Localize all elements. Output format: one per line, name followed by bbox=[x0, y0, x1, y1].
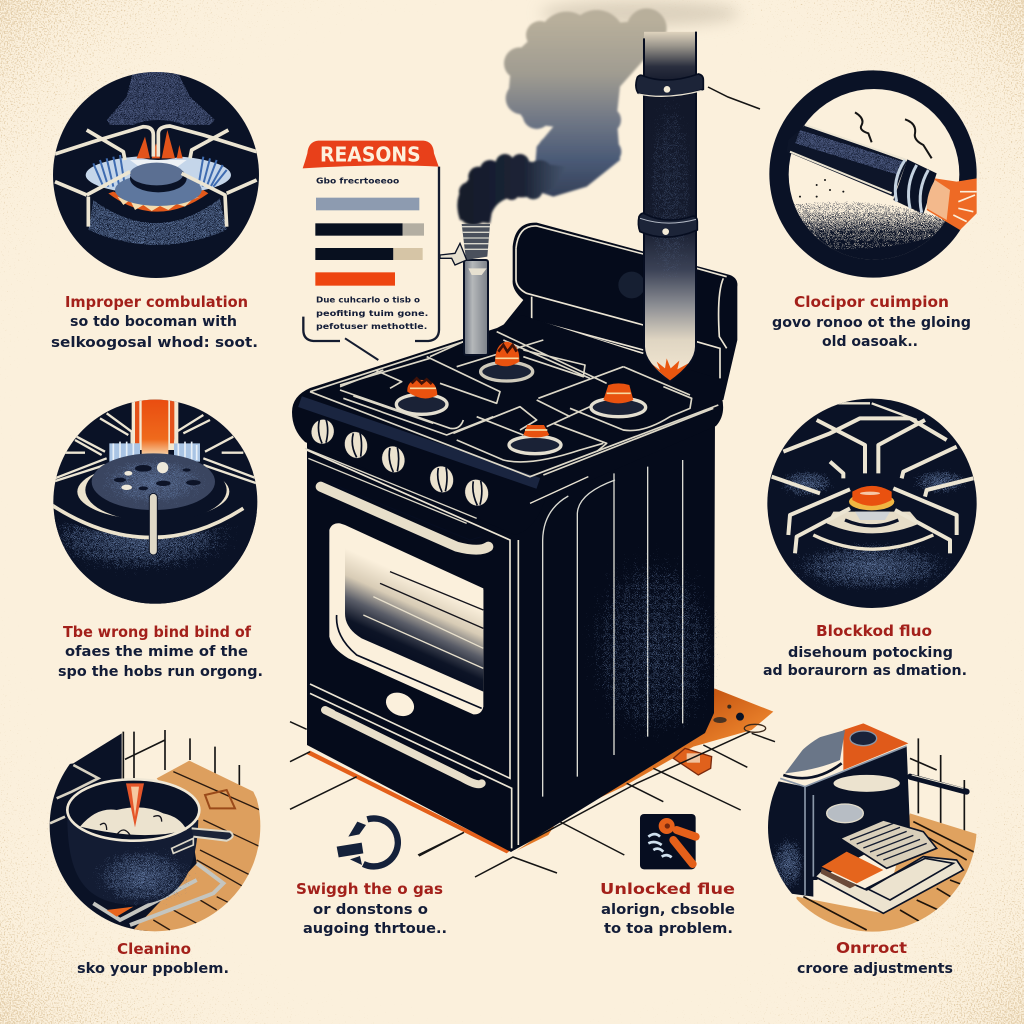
stove: body bbox=[292, 315, 723, 852]
bar 2 bbox=[315, 223, 424, 236]
caption: swirl: augoing thrtoue.. bbox=[303, 921, 447, 937]
icon: orange wrench square bbox=[640, 814, 696, 869]
bar 3 bbox=[315, 248, 423, 260]
caption: middle right: ad boraurorn as dmation. bbox=[763, 663, 967, 679]
icon: gas swirl ring bbox=[337, 818, 398, 866]
header banner bbox=[303, 141, 439, 168]
caption: bottom left: sko your ppoblem. bbox=[77, 961, 229, 977]
card body text: Due cuhcarlo o tisb o bbox=[316, 295, 420, 305]
stove: cooktop with grates, burners and knobs bbox=[300, 332, 718, 523]
caption: middle left: spo the hobs run orgong. bbox=[58, 664, 263, 680]
caption: top right: old oasoak.. bbox=[822, 334, 918, 350]
caption: wrench: to toa problem. bbox=[604, 921, 733, 937]
tall flue pipe bbox=[636, 32, 703, 383]
side panel soot speckle bbox=[578, 540, 728, 753]
burner: back bbox=[481, 342, 533, 381]
caption: bottom right bbox=[797, 939, 953, 977]
side panel ribs bbox=[543, 460, 683, 797]
small exhaust pipe bbox=[440, 224, 490, 355]
debris: orange scrap bbox=[673, 748, 712, 775]
caption: bottom left: Cleanino bbox=[117, 940, 191, 958]
lower drawer handle bbox=[325, 710, 482, 784]
caption: middle right: Blockkod fluo bbox=[816, 622, 932, 640]
caption: bottom right: Onrroct bbox=[836, 939, 907, 957]
caption: top right: govo ronoo ot the gloing bbox=[772, 315, 971, 331]
card body text: peofiting tuim gone. bbox=[316, 308, 428, 318]
caption: top right bbox=[772, 293, 971, 350]
circle: oven interior (bottom right) bbox=[768, 724, 976, 932]
front lip speckle band bbox=[300, 402, 538, 483]
oven window bbox=[329, 523, 483, 714]
floor lines below stove bbox=[418, 833, 557, 877]
caption: top right: Clocipor cuimpion bbox=[794, 293, 949, 311]
burner: left bbox=[396, 378, 447, 414]
caption: top left: selkoogosal whod: soot. bbox=[51, 335, 258, 351]
stove: oven door, window, handles and side panels bbox=[307, 450, 728, 848]
upper collar bbox=[636, 74, 703, 97]
caption: top left: Improper combulation bbox=[65, 293, 248, 311]
caption: wrench: alorign, cbsoble bbox=[601, 902, 735, 918]
circle: sooty burner cap (middle left) bbox=[53, 400, 258, 604]
door logo oval bbox=[382, 688, 418, 720]
knobs bbox=[309, 417, 491, 509]
card body text: pefotuser methottle. bbox=[316, 321, 427, 331]
caption: bottom right: croore adjustments bbox=[797, 961, 953, 977]
caption: wrench: Unlocked flue bbox=[600, 880, 735, 898]
caption: middle left: Tbe wrong bind bind of bbox=[63, 623, 251, 641]
circle: burner with yellow flames (top left) bbox=[53, 72, 259, 278]
circle: clogged hose (top right) bbox=[769, 70, 977, 287]
grate lines bbox=[310, 332, 718, 477]
circle: orange burner cap (middle right) bbox=[767, 398, 977, 608]
oven handle bbox=[321, 487, 488, 550]
callout line to top right circle bbox=[708, 87, 760, 109]
floor lines and orange soot spill bbox=[290, 688, 775, 856]
chart heading: Gbo frecrtoeeoo bbox=[316, 175, 400, 185]
caption: top left: so tdo bocoman with bbox=[70, 314, 237, 330]
smoke cloud bbox=[457, 0, 740, 225]
caption: middle left: ofaes the mime of the bbox=[65, 644, 248, 660]
caption: bottom left bbox=[77, 940, 229, 977]
burner: front bbox=[509, 425, 561, 454]
lower collar bbox=[638, 213, 697, 237]
caption: middle right bbox=[763, 622, 967, 679]
bar 1 bbox=[316, 198, 419, 210]
debris: small particles bbox=[713, 705, 766, 732]
caption: middle right: disehoum potocking bbox=[788, 645, 953, 661]
caption: swirl: Swiggh the o gas bbox=[296, 880, 443, 898]
burner: right bbox=[591, 383, 646, 417]
bar 4 bbox=[315, 272, 395, 286]
vent dots bbox=[618, 272, 645, 298]
caption: top left bbox=[51, 293, 258, 351]
card body text bbox=[316, 295, 428, 331]
caption: wrench bbox=[600, 880, 735, 937]
caption: swirl bbox=[296, 880, 447, 937]
flue flame bbox=[652, 358, 689, 380]
caption: middle left bbox=[58, 623, 263, 680]
header banner: REASONS bbox=[320, 143, 421, 167]
panel: reasons chart card bbox=[303, 141, 439, 360]
stove: backsplash bbox=[497, 223, 737, 400]
caption: swirl: or donstons o bbox=[313, 902, 428, 918]
circle: pot on grate (bottom left) bbox=[50, 730, 260, 932]
